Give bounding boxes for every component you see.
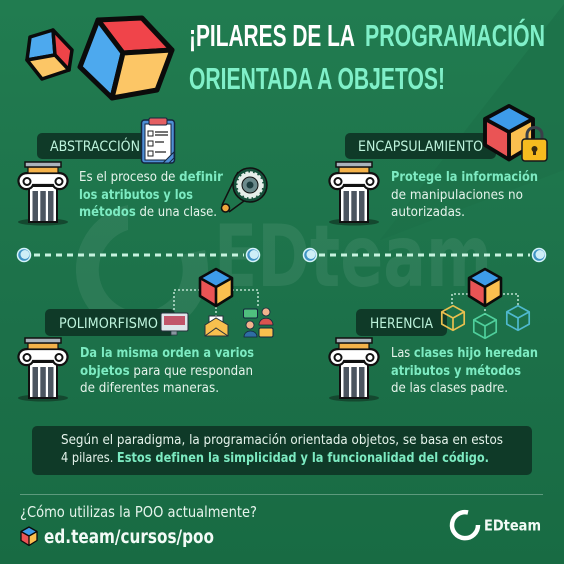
divider: right dotted line <box>304 248 546 262</box>
text: polimorfismo: de diferentes maneras. <box>80 380 219 396</box>
label: encapsulamiento <box>345 133 496 159</box>
icon: people chatting <box>244 308 273 337</box>
icon: pillar <box>18 162 68 226</box>
icon: green child cube <box>474 314 496 338</box>
icon: cube <box>200 269 232 306</box>
footer question: ¿Cómo utilizas la POO actualmente? <box>20 503 257 521</box>
icon: gear and pulley <box>222 168 267 212</box>
callout: summary: 4 pilares. Estos definen la simplicidad y la funcionalidad del código. <box>61 450 489 466</box>
logo: EDteam <box>452 512 541 538</box>
divider: left dotted line <box>18 248 260 262</box>
icon: clipboard <box>142 118 174 163</box>
text: herencia: Las clases hijo heredan <box>391 345 538 361</box>
title <box>189 17 545 96</box>
label: polimorfismo: POLIMORFISMO <box>59 316 158 332</box>
watermark logo <box>76 205 492 336</box>
title: ¡PILARES DE LA <box>189 18 355 53</box>
icon: footer cube <box>21 527 37 546</box>
text: abstracción: Es el proceso de definir <box>79 169 223 185</box>
text: polimorfismo: Da la misma orden a varios <box>80 345 254 361</box>
label: abstracción: ABSTRACCIÓN <box>50 137 140 155</box>
panel: abstracción <box>18 118 267 226</box>
icon: cube with lock <box>485 106 547 161</box>
icon: monitor <box>161 313 188 335</box>
label: herencia <box>356 309 447 336</box>
text: herencia: atributos y métodos <box>391 363 521 379</box>
callout: summary: Según el paradigma, la programación orientada objetos, se basa en estos <box>61 432 503 448</box>
icon: pillar <box>329 338 379 402</box>
footer divider <box>20 494 543 495</box>
icon: envelope <box>205 316 228 336</box>
diagram connectors <box>452 294 518 315</box>
footer link: ed.team/cursos/poo <box>44 527 214 548</box>
label: encapsulamiento: ENCAPSULAMIENTO <box>358 139 483 155</box>
icon: pillar <box>329 162 379 226</box>
text: polimorfismo <box>80 345 254 396</box>
label: herencia: HERENCIA <box>370 316 433 332</box>
text: encapsulamiento: Protege la información <box>391 169 538 185</box>
text: encapsulamiento: de manipulaciones no <box>391 187 523 203</box>
text: abstracción <box>79 169 223 220</box>
icon: big cube <box>80 18 172 98</box>
callout: summary <box>32 426 532 475</box>
label: abstracción <box>37 133 149 159</box>
panel: encapsulamiento <box>329 106 547 226</box>
icon: blue child cube <box>507 306 529 330</box>
icon: pillar <box>18 338 68 402</box>
icon: small cube <box>27 30 72 79</box>
text: encapsulamiento <box>391 169 538 220</box>
text: polimorfismo: objetos para que respondan <box>80 363 253 379</box>
panel: polimorfismo <box>18 269 273 402</box>
logo: EDteam: EDteam <box>484 516 541 534</box>
icon: yellow child cube <box>442 306 464 330</box>
panel: herencia <box>329 269 538 402</box>
text: abstracción: métodos de una clase. <box>79 204 217 220</box>
text: herencia: de las clases padre. <box>391 380 508 396</box>
label: polimorfismo <box>45 309 175 336</box>
title: ORIENTADA A OBJETOS! <box>189 61 445 96</box>
diagram connectors <box>174 290 258 316</box>
text: herencia <box>391 345 538 396</box>
text: encapsulamiento: autorizadas. <box>391 204 465 220</box>
icon: parent cube <box>469 269 501 306</box>
text: abstracción: los atributos y los <box>79 187 193 203</box>
